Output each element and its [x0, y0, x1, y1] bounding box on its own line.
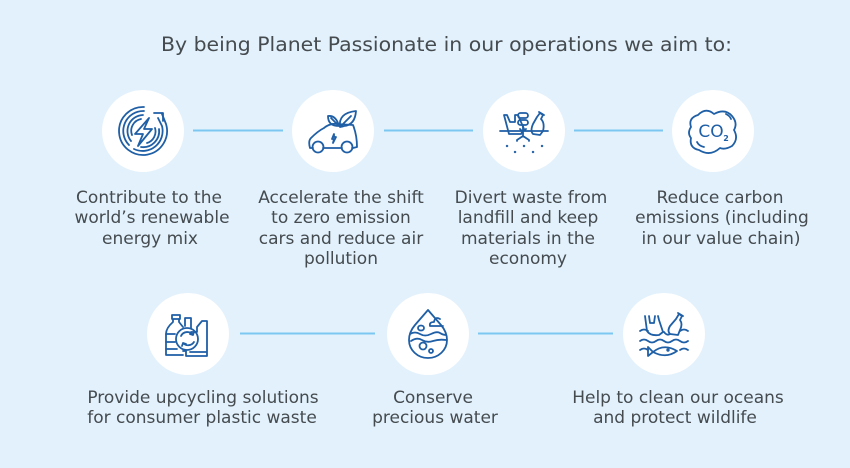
panel: water [372, 293, 498, 428]
text: upcycling: Provide upcycling solutions [87, 388, 319, 408]
text: zero emission cars: pollution [304, 249, 378, 269]
text: water: precious water [372, 408, 498, 428]
panel: carbon emissions [635, 90, 809, 249]
text: carbon emissions: emissions (including [635, 208, 809, 228]
panel: oceans [572, 293, 784, 428]
text: divert waste: Divert waste from [455, 188, 607, 208]
connector: upcycling to water [240, 332, 375, 334]
icon: CO2 cloud: 2 [723, 134, 729, 143]
text: zero emission cars: to zero emission [271, 208, 411, 228]
text: divert waste: materials in the [461, 229, 595, 249]
text: renewable energy: energy mix [102, 229, 198, 249]
text: divert waste: economy [489, 249, 567, 269]
connector: divert waste to carbon [574, 130, 663, 132]
text: oceans: and protect wildlife [593, 408, 757, 428]
text: carbon emissions: in our value chain) [642, 229, 800, 249]
icon: renewable energy spiral and bolt [119, 107, 167, 155]
title: By being Planet Passionate in our operations we aim to: [161, 33, 732, 56]
text: upcycling: for consumer plastic waste [87, 408, 317, 428]
panel: divert waste [455, 90, 607, 269]
icon: waste above landfill [500, 112, 548, 153]
text: carbon emissions: Reduce carbon [656, 188, 784, 208]
panel: upcycling [87, 293, 319, 428]
panel: zero emission cars [258, 90, 424, 269]
text: renewable energy: world’s renewable [74, 208, 230, 228]
text: zero emission cars: cars and reduce air [259, 229, 423, 249]
icon: CO2 cloud: CO [698, 122, 724, 142]
connector: zero emission cars to divert waste [384, 130, 473, 132]
text: zero emission cars: Accelerate the shift [258, 188, 424, 208]
connector: water to oceans [478, 332, 613, 334]
icon: bottle and bag recycling [166, 315, 207, 356]
icon: CO2 cloud [689, 111, 736, 153]
text: divert waste: landfill and keep [458, 208, 598, 228]
icon: water drop [409, 310, 447, 358]
connector arrow: renewable energy to zero emission cars [193, 130, 283, 132]
icon: ocean waste and fish [640, 313, 688, 356]
panel: renewable energy [74, 90, 230, 249]
text: oceans: Help to clean our oceans [572, 388, 784, 408]
icon: electric car with leaves [309, 111, 357, 152]
text: renewable energy: Contribute to the [76, 188, 222, 208]
text: water: Conserve [393, 388, 473, 408]
